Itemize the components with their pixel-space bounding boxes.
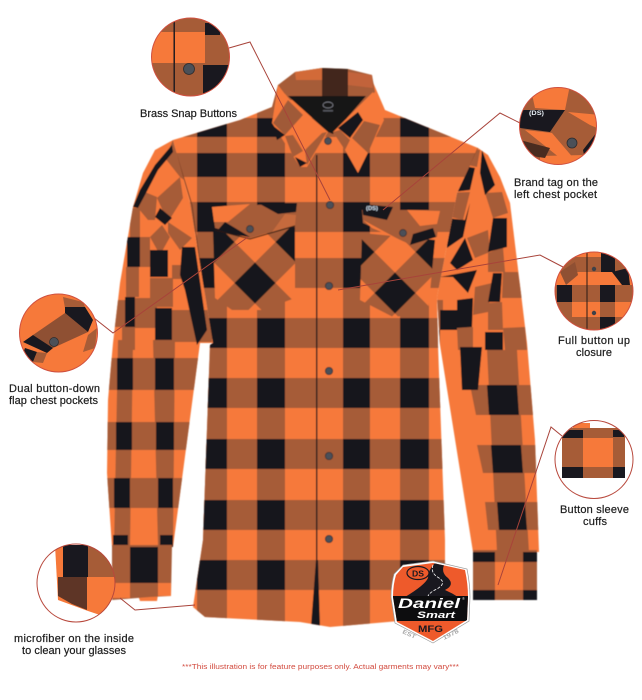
label: button sleeve cuffs bbox=[560, 504, 629, 528]
right cuff bbox=[473, 550, 537, 600]
logo: Daniel Smart MFG: ® bbox=[462, 596, 465, 601]
callout lines bbox=[94, 42, 563, 610]
logo: Daniel Smart MFG: 1978 bbox=[442, 628, 461, 642]
magnifier: microfiber inside cuff bbox=[37, 544, 115, 622]
shirt body plaid bbox=[172, 83, 478, 628]
collar left leaf bbox=[272, 85, 328, 167]
label: microfiber bbox=[14, 633, 134, 657]
label: microfiber: microfiber on the inside bbox=[14, 633, 134, 645]
left sleeve bbox=[106, 140, 214, 548]
disclaimer: ***This illustration is for feature purposes only. Actual garments may vary*** bbox=[182, 662, 459, 671]
right chest pocket: (DS) bbox=[366, 206, 378, 212]
label: full button up closure: closure bbox=[576, 347, 612, 359]
label: full button up closure bbox=[558, 335, 630, 359]
label: dual button-down flap chest pockets: flap chest pockets bbox=[9, 395, 98, 407]
label: full button up closure: Full button up bbox=[558, 335, 630, 347]
label: button sleeve cuffs: Button sleeve bbox=[560, 504, 629, 516]
front snap buttons bbox=[246, 138, 406, 543]
left cuff bbox=[112, 545, 172, 601]
logo: Daniel Smart MFG: MFG bbox=[418, 624, 443, 634]
magnifier: brand tag: (DS) bbox=[529, 111, 544, 117]
label: brand tag: Brand tag on the bbox=[514, 177, 598, 189]
right sleeve bbox=[436, 148, 540, 553]
right chest pocket bbox=[360, 204, 440, 317]
shirt illustration bbox=[100, 60, 545, 660]
label: brand tag: left chest pocket bbox=[514, 189, 597, 201]
label: button sleeve cuffs: cuffs bbox=[583, 516, 608, 528]
logo: Daniel Smart MFG: Daniel bbox=[398, 595, 462, 611]
left chest pocket bbox=[212, 203, 297, 310]
logo: Daniel Smart MFG: EST bbox=[401, 629, 417, 641]
label: microfiber: to clean your glasses bbox=[22, 645, 126, 657]
label: dual button-down flap chest pockets bbox=[9, 383, 100, 407]
logo: Daniel Smart MFG: Smart bbox=[417, 610, 456, 621]
magnifier: dual button-down flap chest pockets bbox=[18, 293, 100, 373]
logo: Daniel Smart MFG: DS bbox=[412, 568, 424, 578]
magnifier: brand tag bbox=[519, 87, 597, 165]
logo: Daniel Smart MFG bbox=[390, 560, 472, 645]
magnifier: brass snap buttons bbox=[150, 17, 232, 97]
label: dual button-down flap chest pockets: Dual button-down bbox=[9, 383, 100, 395]
collar right leaf bbox=[333, 92, 384, 173]
label: brand tag bbox=[514, 177, 598, 201]
magnifier: button sleeve cuffs bbox=[555, 420, 633, 498]
magnifier: full button up closure bbox=[554, 251, 634, 331]
collar back and neck bbox=[278, 68, 375, 134]
label: brass snap buttons: Brass Snap Buttons bbox=[140, 108, 238, 120]
